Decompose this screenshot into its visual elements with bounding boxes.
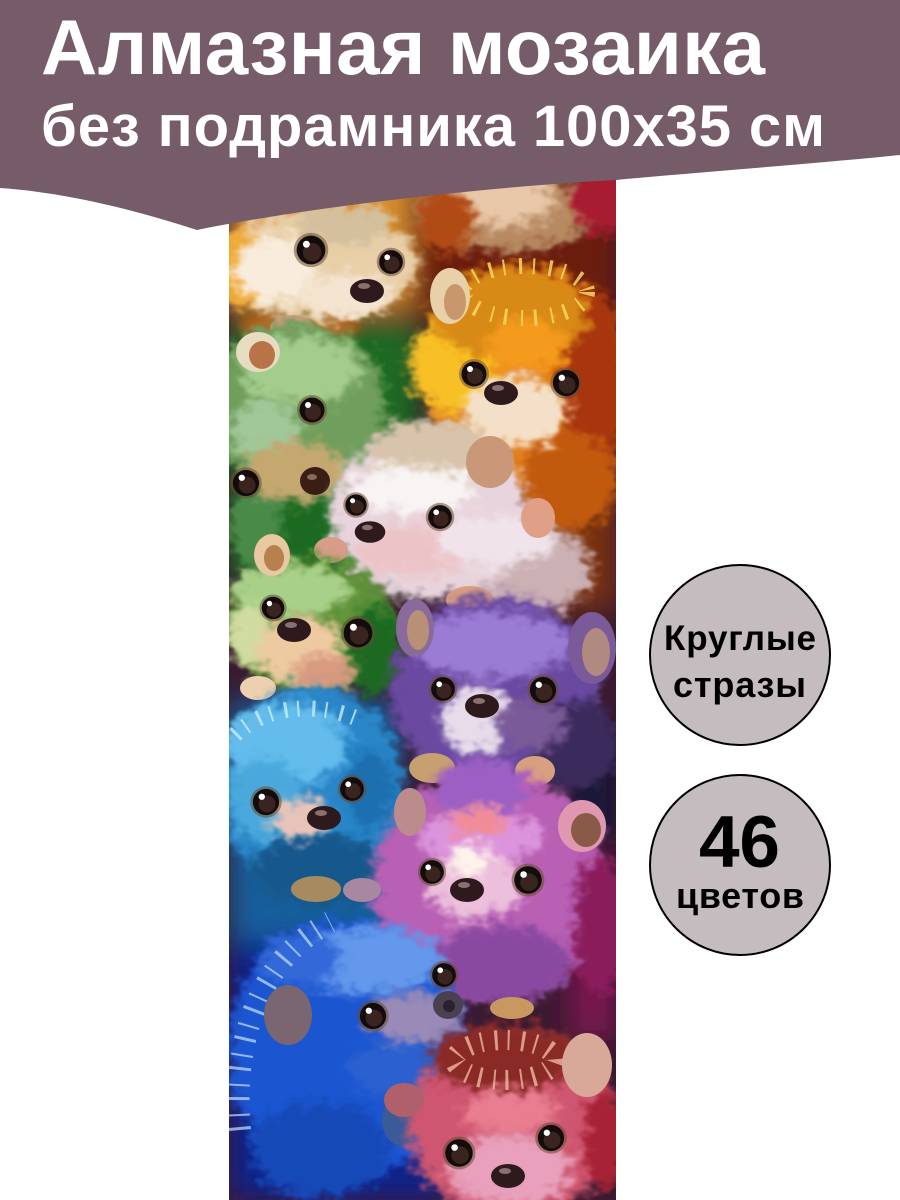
badge: 46 colors: цветов [676,875,804,916]
hedgehog: purple [390,595,620,790]
hedgehog: magenta [343,760,626,1005]
badge: round rhinestones [650,565,830,745]
hedgehog: green upper [205,320,385,565]
badge: 46 colors [650,775,830,955]
background color zones [229,170,620,1200]
hedgehog: white [314,419,592,618]
badge: round rhinestones: Круглые [664,619,816,658]
badge: round rhinestones: стразы [673,664,806,705]
banner [0,0,900,230]
picture: colorful hedgehogs [229,180,616,1200]
badge: 46 colors: 46 [699,802,780,883]
hedgehog: light blue [222,685,402,906]
title: Алмазная мозаика [41,3,766,91]
hedgehog: top tan [408,180,616,264]
hedgehog: deep blue [227,920,463,1198]
hedgehog: cream [216,205,418,342]
subtitle: без подрамника 100х35 см [41,94,825,159]
hedgehog: pink [384,997,627,1200]
hedgehog: orange [409,265,627,530]
hedgehog: green lower [225,534,401,700]
